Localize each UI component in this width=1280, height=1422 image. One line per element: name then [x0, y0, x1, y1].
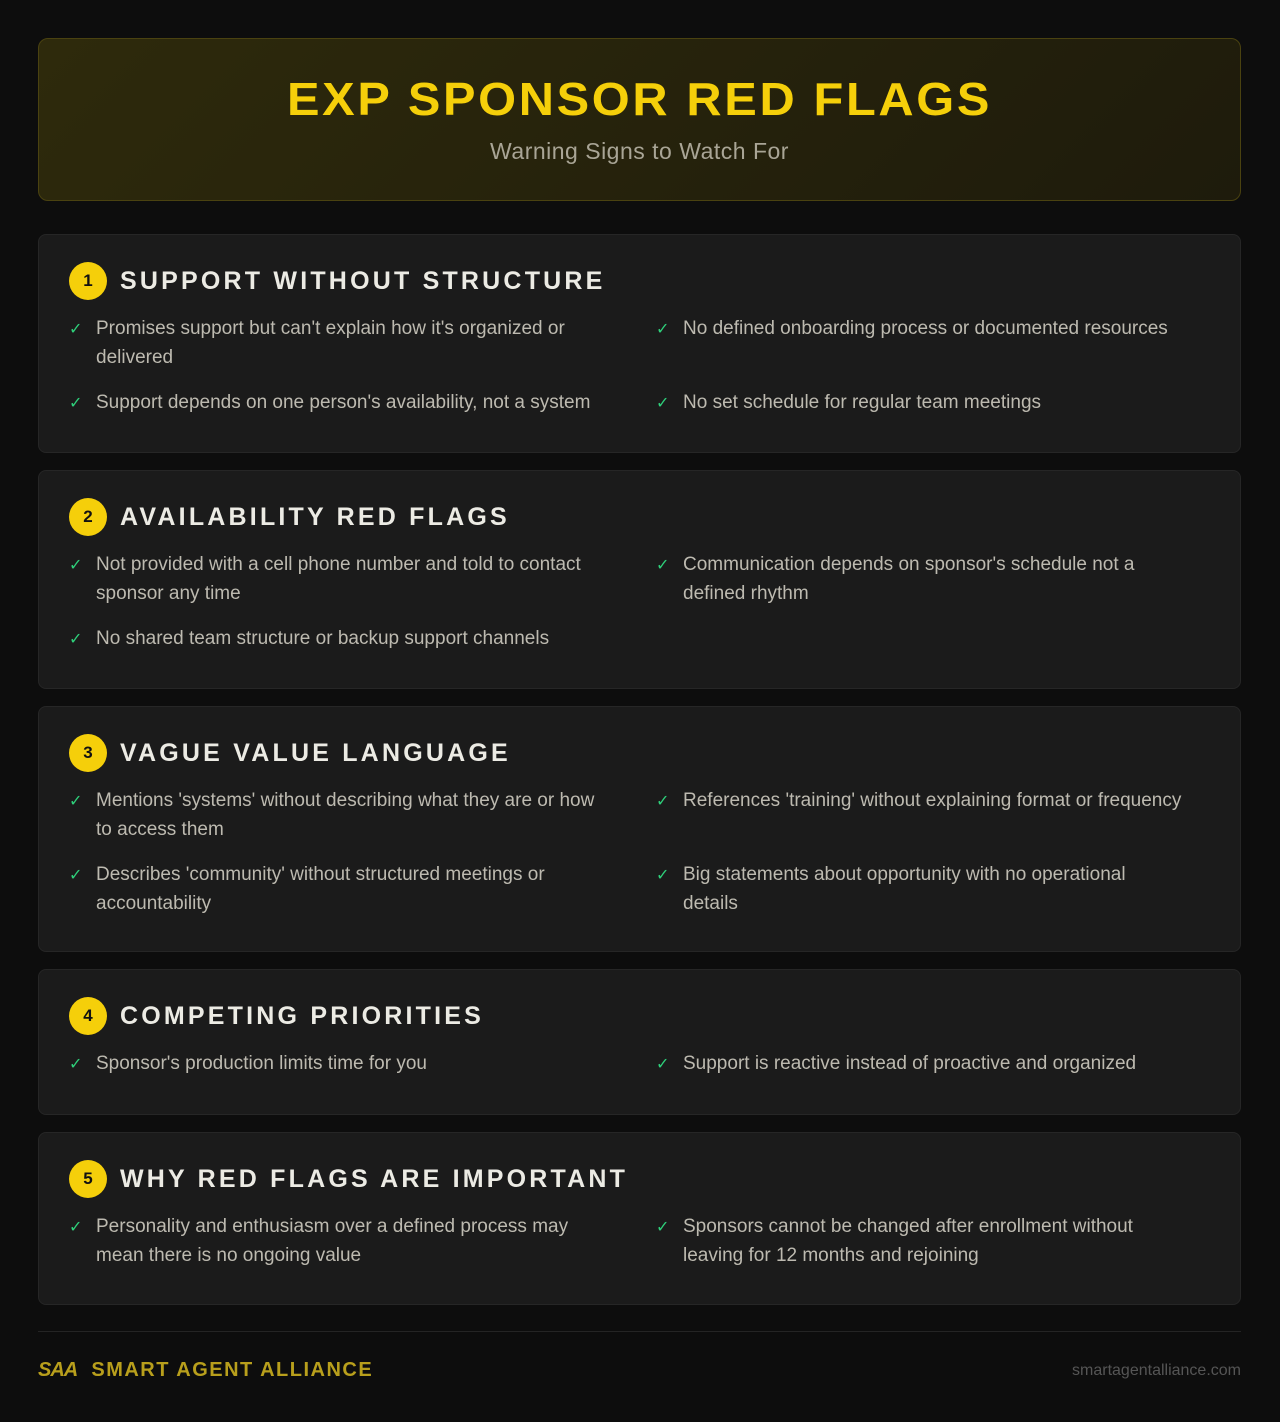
- heading 1: [69, 262, 606, 300]
- items 3: details: [683, 893, 738, 914]
- items 3: accountability: [96, 893, 211, 914]
- panel: why important: [38, 1132, 1241, 1305]
- items 1: delivered: [96, 347, 173, 368]
- panel: vague value: [38, 706, 1241, 952]
- heading 4: COMPETING PRIORITIES: [120, 1002, 484, 1030]
- footer url: smartagentalliance.com: [1072, 1362, 1241, 1379]
- items 4: Support is reactive instead of proactive and organized: [683, 1053, 1136, 1074]
- heading 2: [69, 498, 510, 536]
- items 3: to access them: [96, 819, 224, 840]
- items 4: Sponsor's production limits time for you: [96, 1053, 427, 1074]
- heading 3: VAGUE VALUE LANGUAGE: [120, 738, 511, 766]
- items 5: [71, 1216, 1133, 1266]
- items 2: No shared team structure or backup support channels: [96, 628, 549, 649]
- panel: availability: [38, 470, 1241, 689]
- items 2: Communication depends on sponsor's schedule not a: [683, 554, 1134, 575]
- items 2: [71, 554, 1134, 649]
- items 3: References 'training' without explaining format or frequency: [683, 790, 1181, 811]
- heading 3: [69, 734, 511, 772]
- heading 5: 5: [83, 1169, 93, 1188]
- items 1: Support depends on one person's availability, not a system: [96, 392, 590, 413]
- title: EXP SPONSOR RED FLAGS: [287, 73, 992, 125]
- heading 1: 1: [83, 271, 93, 290]
- items 5: Sponsors cannot be changed after enrollment without: [683, 1216, 1133, 1237]
- heading 2: AVAILABILITY RED FLAGS: [120, 502, 510, 530]
- items 5: Personality and enthusiasm over a defined process may: [96, 1216, 568, 1237]
- heading 1: SUPPORT WITHOUT STRUCTURE: [120, 266, 606, 294]
- items 2: defined rhythm: [683, 583, 809, 604]
- header: [38, 38, 1241, 201]
- footer logo: SAA SMART AGENT ALLIANCE: [38, 1359, 373, 1381]
- heading 5: WHY RED FLAGS ARE IMPORTANT: [120, 1164, 628, 1192]
- panel: competing priorities: [38, 969, 1241, 1115]
- subtitle: Warning Signs to Watch For: [490, 138, 789, 164]
- panel: support without structure: [38, 234, 1241, 453]
- items 5: leaving for 12 months and rejoining: [683, 1245, 979, 1266]
- heading 3: 3: [83, 743, 93, 762]
- items 2: sponsor any time: [96, 583, 241, 604]
- heading 4: 4: [83, 1006, 93, 1025]
- items 2: Not provided with a cell phone number and told to contact: [96, 554, 581, 575]
- heading 5: [69, 1160, 628, 1198]
- heading 4: [69, 997, 484, 1035]
- items 3: Describes 'community' without structured meetings or: [96, 864, 545, 885]
- heading 2: 2: [83, 507, 93, 526]
- items 4: [71, 1053, 1136, 1074]
- items 1: Promises support but can't explain how it's organized or: [96, 318, 565, 339]
- items 5: mean there is no ongoing value: [96, 1245, 361, 1266]
- items 3: Mentions 'systems' without describing what they are or how: [96, 790, 594, 811]
- items 1: No set schedule for regular team meetings: [683, 392, 1041, 413]
- items 1: [71, 318, 1168, 413]
- items 1: No defined onboarding process or documented resources: [683, 318, 1168, 339]
- items 3: Big statements about opportunity with no operational: [683, 864, 1126, 885]
- items 3: [71, 790, 1182, 914]
